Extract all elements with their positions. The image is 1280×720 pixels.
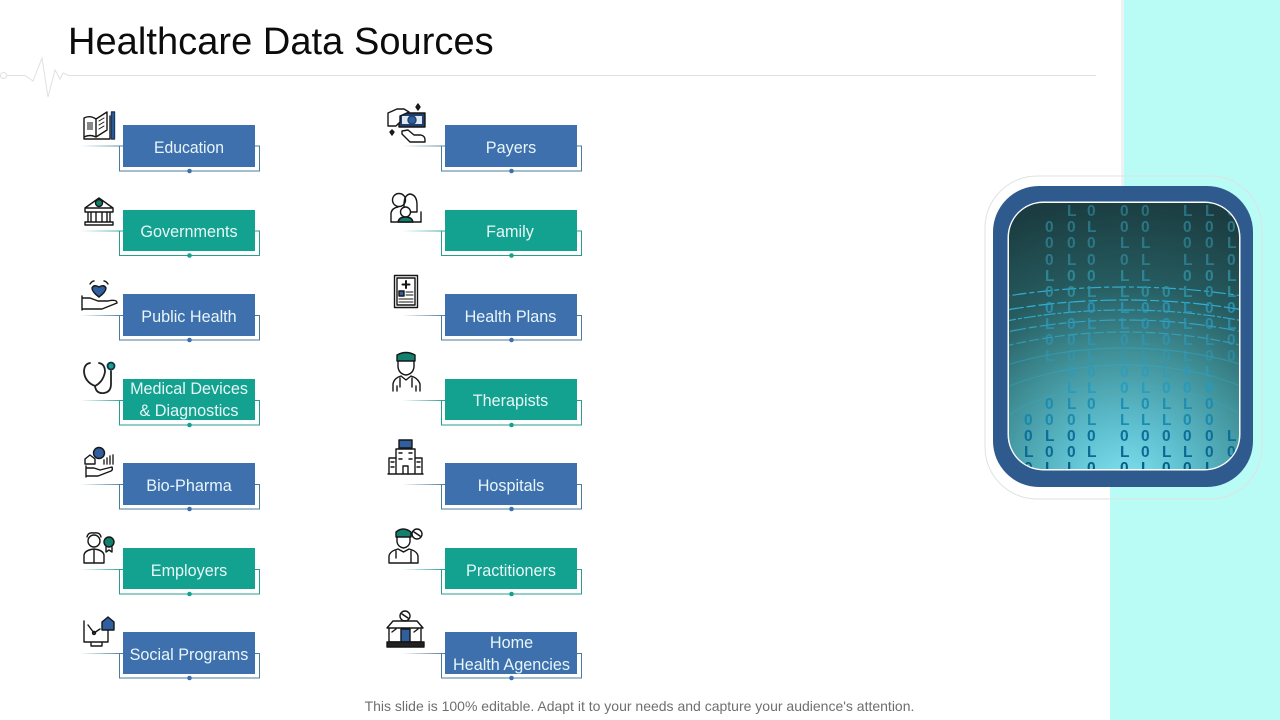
item: Practitioners: [389, 529, 582, 596]
item: Education: [80, 112, 260, 173]
item: Hospitals: [388, 440, 582, 511]
binary digit rows: L0LL00L0L: [1045, 316, 1236, 333]
binary digit rows: 000LLLL00: [1024, 412, 1214, 429]
item: Public Health: Public Health: [141, 308, 237, 326]
icon: open book and pen: [84, 112, 114, 139]
icon: hospital building: [388, 440, 423, 474]
binary digit rows: 0LL00L00L: [1024, 460, 1214, 477]
item: Hospitals: Hospitals: [478, 477, 544, 495]
item: Home Health Agencies: Health Agencies: [453, 656, 570, 674]
icon: family of three: [391, 194, 421, 222]
binary digit rows: L00LL00L: [1045, 268, 1236, 285]
item: Therapists: Therapists: [473, 392, 548, 410]
item: Health Plans: Health Plans: [465, 308, 556, 326]
binary digit rows: L000LL0: [1067, 203, 1236, 220]
icon: government building: [85, 198, 113, 225]
binary digit rows: 000LL00L: [1045, 235, 1236, 252]
binary digit rows: L00LL0LL00: [1024, 444, 1236, 461]
binary digit rows: 00L0L0LL0: [1045, 332, 1236, 349]
title: Healthcare Data Sources: [68, 21, 494, 63]
item: Bio-Pharma: [80, 448, 260, 511]
icon: hands exchanging money: [388, 104, 425, 142]
item: Family: Family: [486, 223, 535, 241]
arcs of data: [1009, 286, 1239, 415]
icon: employer with badge: [84, 533, 114, 563]
icon: medical clipboard: [394, 276, 418, 308]
item: Employers: [80, 533, 260, 596]
item: Medical Devices and Diagnostics: Medical Devices: [130, 380, 248, 398]
item: Therapists: [393, 352, 582, 427]
item: Payers: [388, 104, 582, 173]
image: binary digits screen: [1009, 203, 1239, 469]
binary digit rows: 0L0L0LL0: [1045, 396, 1214, 413]
item: Bio-Pharma: Bio-Pharma: [146, 477, 232, 495]
footer note: This slide is 100% editable. Adapt it to your needs and capture your audience's attention.: [365, 698, 914, 714]
binary digit rows: L0LLL0L00: [1045, 348, 1236, 365]
background panel: cyan side band: [1110, 0, 1280, 720]
icon: hand with coin, house and chart: [85, 448, 113, 477]
item: Social Programs: Social Programs: [130, 646, 248, 664]
binary digit rows: 00LL00L0L: [1045, 284, 1236, 301]
binary digit rows: 00L00000: [1045, 219, 1236, 236]
item: Health Plans: [394, 276, 582, 342]
item: Governments: Governments: [140, 223, 238, 241]
heartbeat divider line: [0, 58, 1096, 97]
binary digit rows: 0L0L00L00: [1045, 300, 1236, 317]
item: Employers: Employers: [151, 562, 227, 580]
binary digit rows: 0000L0L: [1067, 364, 1214, 381]
panel: framed binary data image: [984, 176, 1262, 500]
item: Medical Devices and Diagnostics: [80, 362, 260, 427]
item: Payers: Payers: [486, 139, 536, 157]
icon: monitor with network: [84, 617, 114, 646]
item: Governments: [80, 198, 260, 258]
item: Public Health: [80, 281, 260, 342]
binary digit rows: [1024, 203, 1236, 477]
icon: hand holding heart: [82, 281, 117, 310]
icon: stethoscope: [84, 362, 114, 393]
icon: therapist with cap: [393, 352, 420, 391]
icon: clinic storefront: [387, 611, 424, 647]
binary digit rows: 0L0000000L: [1024, 428, 1236, 445]
binary digit rows: LL0L000: [1067, 380, 1214, 397]
item: Social Programs: [80, 617, 260, 680]
item: Medical Devices and Diagnostics: & Diagnostics: [140, 402, 238, 420]
item: Home Health Agencies: Home: [490, 634, 533, 652]
binary digit rows: 0L00LLL0: [1045, 252, 1236, 269]
item: Family: [391, 194, 582, 258]
icon: practitioner with badge: [389, 529, 422, 563]
item: Home Health Agencies: [387, 611, 582, 680]
item: Education: Education: [154, 139, 224, 157]
item: Practitioners: Practitioners: [466, 562, 556, 580]
